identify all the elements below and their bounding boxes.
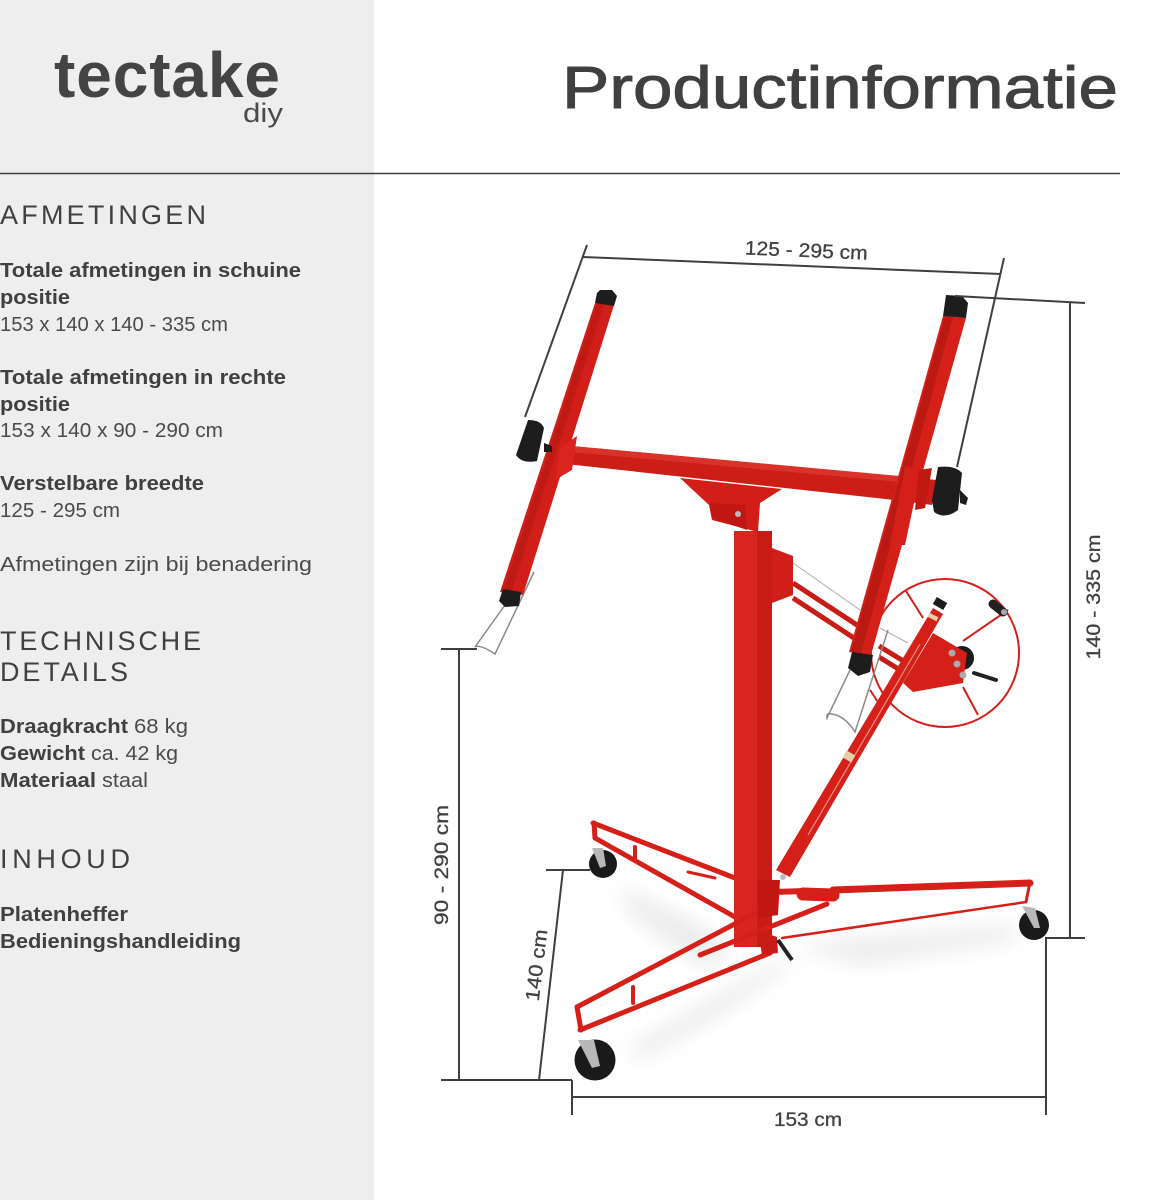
dimension: base width	[572, 938, 1046, 1131]
left arm plate	[555, 436, 577, 480]
label: 140 - 335 cm: 140 - 335 cm	[1083, 535, 1105, 659]
label: 90 - 290 cm: 90 - 290 cm	[431, 805, 453, 925]
label: 140 cm: 140 cm	[522, 928, 552, 1002]
text: draagkracht: Draagkracht	[0, 716, 128, 738]
column side plate	[772, 548, 793, 603]
front leg	[577, 904, 827, 1030]
text: draagkracht	[0, 716, 188, 738]
wheel: right	[1019, 906, 1049, 940]
text: materiaal	[0, 770, 148, 792]
winch drum	[950, 646, 974, 670]
text: gewicht: Gewicht	[0, 743, 85, 765]
section: inhoud	[0, 844, 241, 953]
left arm	[500, 303, 614, 595]
text: totale afmetingen schuin: positie	[0, 287, 70, 309]
section: technische details	[0, 626, 201, 792]
wheel: rear left	[589, 848, 617, 878]
label: 125 - 295 cm: 125 - 295 cm	[744, 237, 868, 265]
right leg	[773, 882, 1030, 938]
text: totale afmetingen recht: positie	[0, 394, 70, 416]
head bracket	[680, 478, 782, 532]
right arm	[849, 316, 966, 655]
heading: technische details: DETAILS	[0, 657, 128, 687]
heading: afmetingen: AFMETINGEN	[0, 200, 206, 230]
winch handles	[974, 604, 1007, 680]
casters	[574, 848, 1049, 1080]
wheel: front	[574, 1040, 616, 1080]
rear left leg	[593, 823, 735, 917]
hook wire left	[475, 572, 534, 654]
text: materiaal: Materiaal	[0, 770, 96, 792]
hook wire right	[827, 630, 888, 732]
base legs	[593, 823, 1030, 938]
text: draagkracht: 68 kg	[134, 716, 188, 738]
wheel	[870, 579, 1019, 727]
text: inhoud list	[0, 904, 241, 953]
column	[734, 531, 778, 947]
text: totale afmetingen schuin: Totale afmetingen in schuine	[0, 260, 301, 282]
text: benadering note: Afmetingen zijn bij benadering	[0, 554, 312, 576]
right arm plate	[915, 468, 932, 510]
text: verstelbare breedte: Verstelbare breedte	[0, 473, 204, 495]
logo: tectake diy: diy	[243, 98, 284, 128]
text: totale afmetingen schuin: 153 x 140 x 140 - 335 cm	[0, 314, 228, 336]
illustration: panel lift	[475, 290, 1049, 1080]
mast diagonal	[776, 600, 943, 877]
base hub	[758, 874, 792, 960]
panel: left sidebar	[0, 0, 374, 1200]
dimension: total height	[955, 296, 1105, 938]
text: inhoud list: Platenheffer	[0, 904, 128, 926]
text: inhoud list: Bedieningshandleiding	[0, 931, 241, 953]
black caps and knobs	[499, 290, 968, 676]
text: totale afmetingen recht: 153 x 140 x 90 - 290 cm	[0, 420, 223, 442]
text: totale afmetingen recht: Totale afmetingen in rechte	[0, 367, 286, 389]
winch box	[903, 633, 967, 692]
heading: inhoud: INHOUD	[0, 844, 130, 874]
label: 153 cm: 153 cm	[774, 1109, 842, 1131]
text: gewicht: ca. 42 kg	[91, 743, 178, 765]
text: verstelbare breedte: 125 - 295 cm	[0, 500, 120, 522]
text: totale afmetingen schuin	[0, 260, 301, 336]
dimension: adjustable width	[525, 237, 1004, 467]
text: totale afmetingen recht	[0, 367, 286, 442]
cable	[793, 563, 908, 643]
title: Productinformatie	[562, 55, 1118, 121]
floor shadows	[620, 885, 1020, 1060]
dimension: depth	[522, 870, 590, 1080]
text: verstelbare breedte	[0, 473, 204, 522]
text: materiaal: staal	[102, 770, 148, 792]
heading: technische details: TECHNISCHE	[0, 626, 201, 656]
winch arms	[793, 583, 905, 670]
section: afmetingen	[0, 200, 312, 576]
dimension: upright height	[431, 649, 572, 1080]
cross beam	[566, 446, 937, 505]
text: gewicht	[0, 743, 178, 765]
logo: tectake diy: tectake	[54, 39, 280, 111]
heading: technische details	[0, 626, 201, 687]
